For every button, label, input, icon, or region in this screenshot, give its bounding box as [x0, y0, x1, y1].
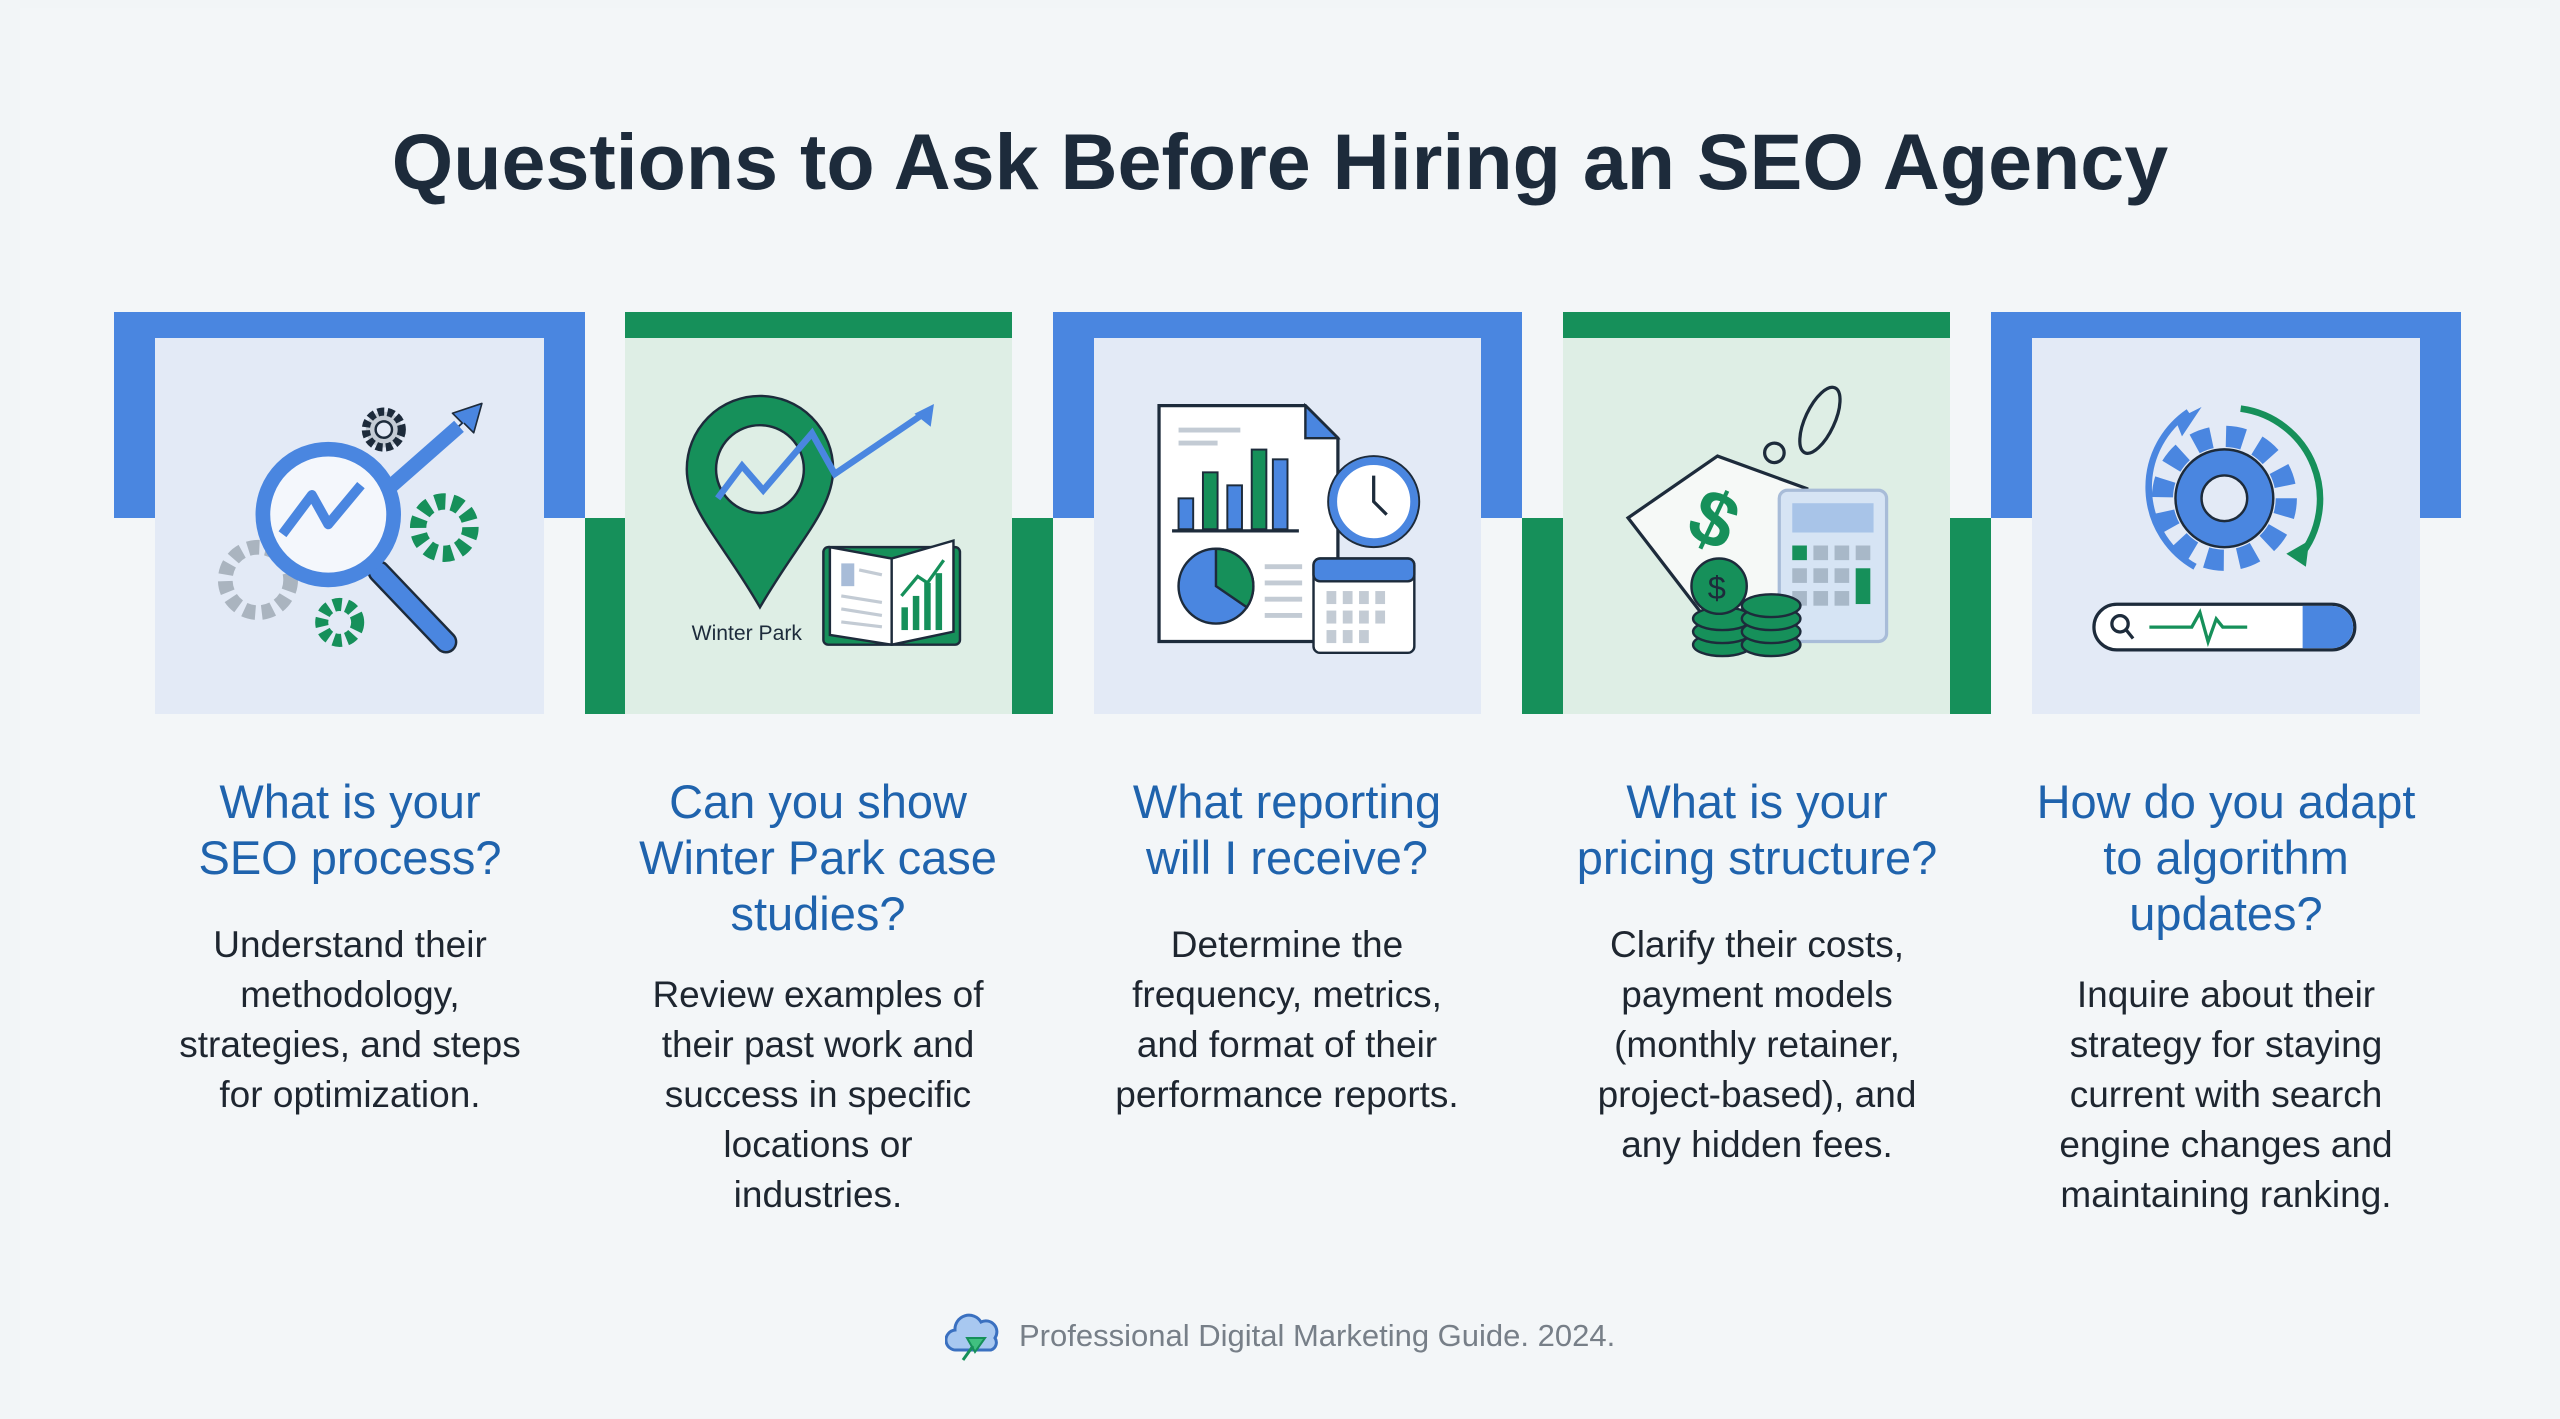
column 4 text [1577, 775, 1937, 1165]
title: Questions to Ask Before Hiring an SEO Agency [392, 117, 2168, 206]
icon: location pin, trend and book: Winter Park [692, 622, 802, 645]
body 1: for optimization. [219, 1074, 481, 1115]
panel 3 frame [1053, 312, 1522, 714]
icon: report, clock and calendar [1157, 402, 1420, 654]
panel 1 frame [114, 312, 585, 714]
heading 3 [1133, 775, 1441, 884]
heading 2 [639, 775, 997, 940]
footer text: Professional Digital Marketing Guide. 2024. [1019, 1318, 1615, 1353]
body 5: current with search [2070, 1074, 2382, 1115]
body 1: strategies, and steps [179, 1024, 521, 1065]
body 2: locations or [723, 1124, 913, 1165]
body 1 [179, 924, 521, 1115]
panel 2 frame [585, 312, 1053, 714]
body 5 [2059, 974, 2393, 1215]
body 3: Determine the [1171, 924, 1403, 965]
column 2 text [639, 775, 997, 1215]
body 2: Review examples of [652, 974, 984, 1015]
body 5: Inquire about their [2077, 974, 2375, 1015]
panel 4 frame [1522, 312, 1991, 714]
heading 1 [198, 775, 502, 884]
heading 2: Winter Park case [639, 831, 997, 884]
heading 4: pricing structure? [1577, 831, 1937, 884]
body 3: and format of their [1137, 1024, 1437, 1065]
body 4: Clarify their costs, [1610, 924, 1904, 965]
body 4: any hidden fees. [1621, 1124, 1893, 1165]
body 2 [652, 974, 984, 1215]
heading 5: updates? [2129, 887, 2323, 940]
body 4: project-based), and [1598, 1074, 1916, 1115]
heading 4 [1577, 775, 1937, 884]
body 5: strategy for staying [2070, 1024, 2382, 1065]
footer [945, 1314, 1615, 1361]
body 1: Understand their [213, 924, 487, 965]
body 2: success in specific [665, 1074, 971, 1115]
body 3: performance reports. [1115, 1074, 1459, 1115]
heading 1: SEO process? [198, 831, 502, 884]
heading 3: will I receive? [1146, 831, 1428, 884]
icon: magnifier with gears and arrow [218, 402, 483, 654]
body 3 [1115, 924, 1459, 1115]
body 4: payment models [1621, 974, 1893, 1015]
body 3: frequency, metrics, [1132, 974, 1442, 1015]
heading 2: studies? [730, 887, 906, 940]
heading 1: What is your [219, 775, 481, 828]
body 4: (monthly retainer, [1614, 1024, 1900, 1065]
icon: cloud [945, 1314, 998, 1361]
heading 2: Can you show [669, 775, 967, 828]
body 4 [1598, 924, 1916, 1165]
heading 5: How do you adapt [2037, 775, 2415, 828]
body 1: methodology, [240, 974, 460, 1015]
column 5 text [2037, 775, 2416, 1215]
column 1 text [179, 775, 521, 1115]
body 2: industries. [734, 1174, 902, 1215]
heading 5: to algorithm [2103, 831, 2349, 884]
body 2: their past work and [662, 1024, 974, 1065]
body 5: engine changes and [2059, 1124, 2393, 1165]
icon: gear with refresh arrows and search bar [2092, 405, 2356, 652]
icon: location pin, trend and book [686, 394, 962, 646]
body 5: maintaining ranking. [2060, 1174, 2392, 1215]
heading 3: What reporting [1133, 775, 1441, 828]
icon: price tag, coins and calculator [1626, 386, 1888, 658]
icon: price tag, coins and calculator: $ [1708, 570, 1726, 606]
heading 5 [2037, 775, 2416, 940]
panel 5 frame [1991, 312, 2461, 714]
icon: price tag, coins and calculator: $ [1676, 470, 1752, 568]
column 3 text [1115, 775, 1459, 1115]
heading 4: What is your [1626, 775, 1888, 828]
